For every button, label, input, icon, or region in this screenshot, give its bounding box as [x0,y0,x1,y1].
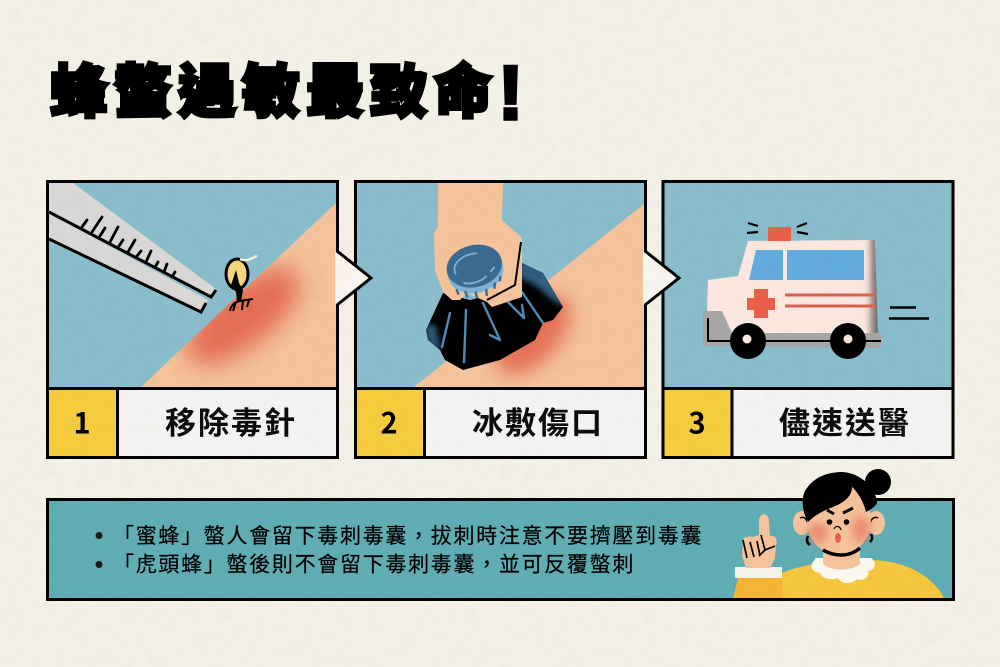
step number 3 [664,390,730,456]
icon: ice bag [426,263,563,370]
icon: ambulance [703,223,929,359]
neck [823,545,860,570]
step number 1: 1 [73,400,91,442]
panel: notes [48,500,954,600]
arrow: step 1 to 2 [335,251,371,305]
hair [803,472,877,522]
redness around ice pack [486,285,581,384]
panel: step 3 ambulance [663,182,953,458]
step label 2: 冰敷傷口 [472,398,604,443]
step number 1 [49,390,116,456]
face details [827,508,853,543]
step number 2 [357,390,423,456]
cheeks [808,523,828,543]
sleeve [733,578,783,598]
icon: stinger [226,256,257,311]
arrow: step 2 to 3 [643,251,679,305]
icon: ice bag cap [446,244,504,299]
step label 1: 移除毒針 [165,398,297,443]
scene background [664,183,952,387]
icon: tweezers [49,183,216,313]
face [807,485,871,555]
cuff [735,567,782,578]
note 1: 「蜜蜂」螫人會留下毒刺毒囊，拔刺時注意不要擠壓到毒囊 [113,520,703,550]
collar [811,558,875,583]
step number 2: 2 [380,400,398,442]
choker [823,548,860,555]
step label 3: 儘速送醫 [779,398,911,443]
title: ! [498,51,523,136]
character: woman pointing finger [733,469,944,598]
scene: hand holding ice pack [357,183,644,388]
ears [793,511,885,535]
panel: step 1 remove stinger [48,182,338,458]
scene: tweezers and stinger on skin [49,183,336,387]
redness on skin [171,250,315,382]
title: 蜂螫過敏最致命 [50,45,498,129]
hand with raised finger [742,514,777,568]
icon: hand [434,183,522,307]
step number 3: 3 [688,400,706,442]
earrings [807,534,872,545]
note 2: 「虎頭蜂」螫後則不會留下毒刺毒囊，並可反覆螫刺 [113,548,635,578]
sweater [782,560,944,598]
panel: step 2 ice pack [356,182,646,458]
